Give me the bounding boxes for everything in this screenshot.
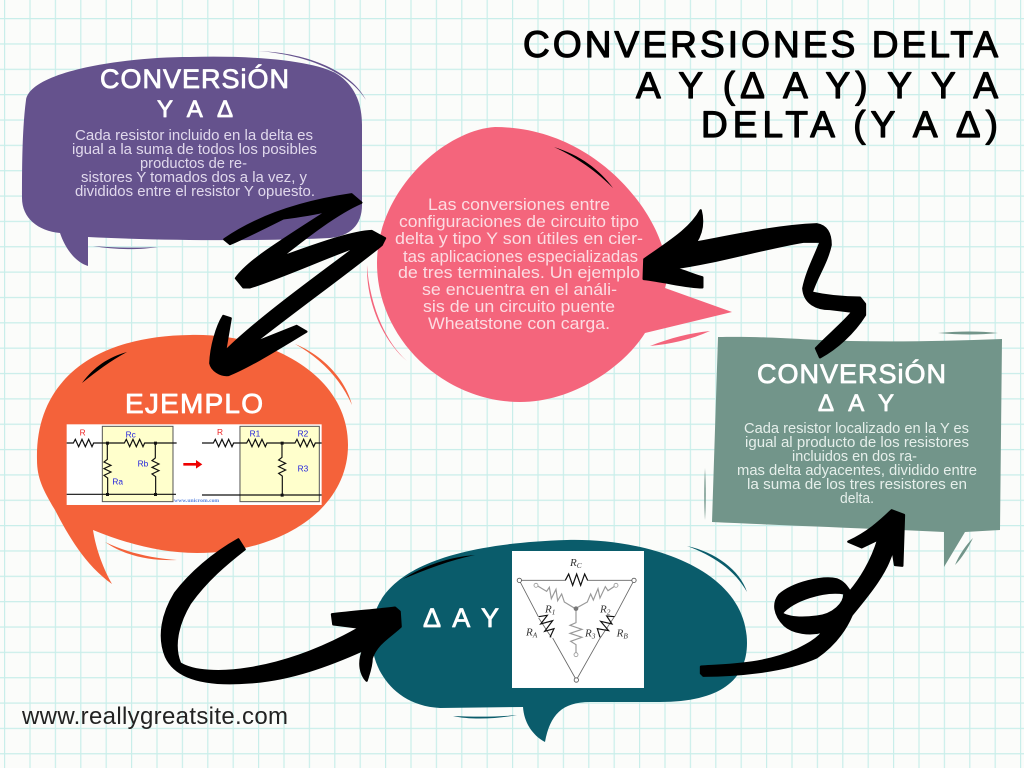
circuit diagram: delta to Y: R3 <box>298 464 309 474</box>
body text: Cada resistor localizado en la Y es <box>744 421 969 437</box>
speech bubble: green <box>712 337 1002 567</box>
heading: Δ A Y <box>423 603 499 633</box>
circuit diagram: delta to Y: www.unicrom.com <box>174 498 219 504</box>
circuit diagram: delta to Y: R <box>217 427 223 437</box>
panel: conversion delta a Y <box>704 332 1002 567</box>
body text: delta. <box>840 491 874 507</box>
circuit diagram: triangle: R <box>526 627 533 639</box>
arrow: from green to pink <box>644 210 865 357</box>
speech bubble: orange <box>37 335 348 584</box>
heading <box>757 358 946 417</box>
circuit diagram: triangle: 1 <box>552 607 555 616</box>
heading: Y A Δ <box>157 96 233 123</box>
arrow: from teal to green <box>701 510 904 676</box>
heading <box>100 63 289 123</box>
heading: CONVERSiÓN <box>100 63 289 94</box>
circuit diagram: delta to Y: R2 <box>298 429 309 439</box>
circuit diagram: triangle: B <box>623 631 628 640</box>
body text <box>737 421 977 507</box>
circuit diagram: delta to Y: R <box>80 428 86 438</box>
body text: sis de un circuito puente <box>423 298 615 316</box>
body text: sistores Y tomados dos a la vez, y <box>81 170 308 186</box>
arrow: zigzag from purple to orange <box>210 194 385 375</box>
circuit diagram: triangle: R <box>617 627 623 639</box>
circuit diagram: delta to Y: Rc <box>126 430 136 440</box>
circuit diagram: triangle: R <box>545 603 552 615</box>
speech bubble: teal <box>372 540 747 742</box>
body text: divididos entre el resistor Y opuesto. <box>75 184 315 200</box>
heading: Δ A Y <box>818 390 894 417</box>
panel: delta a Y diagram bubble <box>372 540 747 742</box>
body text: configuraciones de circuito tipo <box>399 213 639 231</box>
body text: Wheatstone con carga. <box>428 315 610 333</box>
body text: Las conversiones entre <box>428 196 610 214</box>
title <box>523 24 998 145</box>
body text: de tres terminales. Un ejemplo <box>398 264 640 282</box>
body text: delta y tipo Y son útiles en cier- <box>395 230 643 248</box>
panel: ejemplo <box>37 335 352 584</box>
arrow: from orange to teal <box>162 539 401 683</box>
body text: igual a la suma de todos los posibles <box>72 142 317 158</box>
panel: intro pink bubble <box>367 127 732 402</box>
circuit diagram: triangle: R <box>600 603 607 615</box>
body text: igual al producto de los resistores <box>745 435 969 451</box>
website footer: www.reallygreatsite.com <box>21 703 288 730</box>
body text: mas delta adyacentes, dividido entre <box>737 463 977 479</box>
heading: CONVERSiÓN <box>757 358 946 389</box>
body text: productos de re- <box>140 156 247 172</box>
title: CONVERSIONES DELTA <box>523 24 998 65</box>
body text: tas aplicaciones especializadas <box>403 248 638 266</box>
heading: EJEMPLO <box>125 388 263 419</box>
circuit diagram: triangle: 3 <box>591 632 596 641</box>
circuit diagram: triangle: C <box>577 561 582 570</box>
circuit diagram: delta to Y: R1 <box>250 428 261 438</box>
speech bubble: pink <box>377 127 732 402</box>
body text <box>72 128 317 200</box>
body text: Cada resistor incluido en la delta es <box>75 128 313 144</box>
title: DELTA (Y A Δ) <box>701 104 998 145</box>
speech bubble: purple <box>22 57 362 266</box>
circuit diagram: triangle: R <box>585 628 592 640</box>
panel: conversion Y a delta <box>22 51 366 266</box>
circuit diagram: triangle: 2 <box>607 607 611 616</box>
title: A Y (Δ A Y) Y Y A <box>636 65 998 106</box>
circuit diagram: delta to Y: Rb <box>138 458 149 468</box>
circuit diagram: triangle: A <box>532 631 538 640</box>
body text: se encuentra en el análi- <box>422 281 617 299</box>
circuit diagram: triangle: R <box>570 557 577 569</box>
body text: incluidos en dos ra- <box>792 449 917 465</box>
circuit diagram: delta to Y <box>67 424 322 505</box>
body text: la suma de los tres resistores en <box>747 477 967 493</box>
circuit diagram: delta to Y: Ra <box>112 477 123 487</box>
circuit diagram: triangle <box>512 551 644 688</box>
body text <box>395 196 643 333</box>
